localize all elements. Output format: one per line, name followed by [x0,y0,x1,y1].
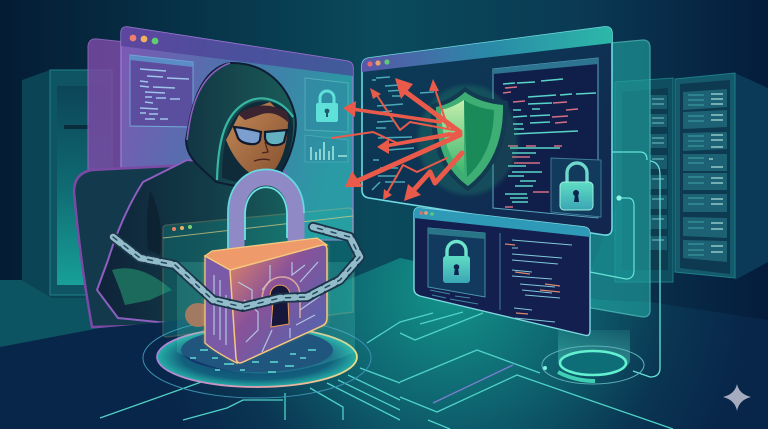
lock hologram platform [143,318,371,398]
desk surface [0,258,768,429]
face [226,102,288,176]
padlock [205,170,327,363]
chain [113,227,360,307]
hood [186,63,296,188]
glasses [234,127,287,145]
hair [238,105,290,124]
server cabinet left [0,70,112,347]
panel: left main window [121,27,353,240]
hood inner rim [217,98,293,180]
monitor ring [542,330,644,384]
nose and mouth [254,142,270,161]
sleeve highlights [112,268,172,305]
icon: shield [418,85,518,195]
chair [74,165,190,327]
panel: bottom window [414,208,590,336]
hoodie body [97,160,302,330]
hood shadow inside [222,101,293,186]
person in hoodie [97,63,302,330]
red attack arrows [332,78,462,201]
hand [185,303,211,327]
icon: sparkle [723,384,751,411]
server racks right [615,73,768,282]
panel: back teal windows on right [580,40,660,377]
small yellow-framed window behind lock [163,208,355,374]
circuit lines on desk [100,312,673,429]
panel: right main window [362,27,612,235]
panel: back purple window [88,39,125,175]
